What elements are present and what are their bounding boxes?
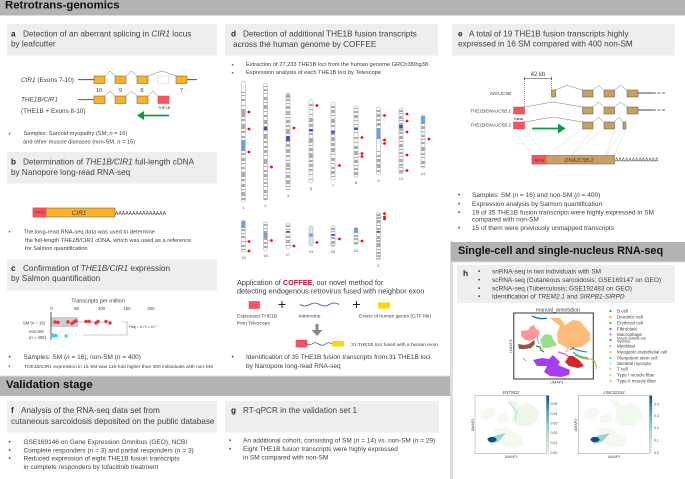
panel d notes: • xyxy=(232,70,234,76)
ideogram: chromosomes with THE1B fusion loci: 3 xyxy=(287,193,290,198)
UMAP legend: Dendritic cell xyxy=(617,314,643,320)
ideogram: chromosomes with THE1B fusion loci: 2 xyxy=(264,203,267,208)
COFFEE inputs: Exons of human genes (GTF file) xyxy=(359,314,431,320)
panel b heading: Determination of xyxy=(23,158,85,166)
diagram: CIR1 exons: 7 xyxy=(180,88,183,94)
ideogram: chromosomes with THE1B fusion loci: 20 xyxy=(331,249,336,254)
UMAP legend: Type II muscle fiber xyxy=(617,378,657,384)
diagram: THE1B/CIR1 fusion xyxy=(21,91,171,115)
diagram: CIR1 exons: 10 xyxy=(96,88,102,94)
COFFEE method title: detecting endogenous retrovirus fused with neighbor exon xyxy=(237,286,424,295)
panel g heading xyxy=(225,401,439,432)
panel c heading: c xyxy=(11,264,16,273)
UMAP legend: T cell xyxy=(617,366,628,372)
panel d notes: • xyxy=(232,62,234,68)
panel d result notes: by Nanopore long-read RNA-seq xyxy=(246,363,341,370)
arrow: gray down xyxy=(312,324,322,336)
COFFEE inputs xyxy=(237,301,431,326)
UMAP legend: Myogenic endothelial cell xyxy=(617,350,667,354)
feature plot: LINC02154: 0.1 xyxy=(654,438,659,442)
panel h heading and notes: • xyxy=(478,268,481,276)
panel b notes: • xyxy=(8,230,10,236)
feature plot: LINC02154: 0.0 xyxy=(654,451,659,455)
diagram: THE1B/CIR1 fusion: (THE1B + Exons 8-10) xyxy=(21,108,85,115)
panel h heading and notes: • xyxy=(478,285,481,292)
COFFEE inputs: Expressed THE1B xyxy=(237,314,277,320)
panel c heading: Confirmation of xyxy=(23,264,81,273)
ideogram: chromosomes with THE1B fusion loci: 14 xyxy=(421,171,426,176)
panel b notes: for Salmon quantification xyxy=(25,246,88,252)
ideogram: chromosomes with THE1B fusion loci: 12 xyxy=(399,176,404,181)
panel g notes: An additional cohort, consisting of SM (n = 14) vs. non-SM (n = 29) xyxy=(243,438,435,444)
ideogram: chromosomes with THE1B fusion loci: 15 xyxy=(241,255,246,260)
panel c notes: Samples: SM (n = 16), non-SM (n = 400) xyxy=(24,354,141,361)
panel e heading: expressed in 16 SM compared with 400 non-SM xyxy=(458,40,633,49)
COFFEE inputs: from Telescope xyxy=(237,320,270,326)
UMAP legend: Myoblast xyxy=(617,344,636,348)
feature plot: LINC02154: 0.2 xyxy=(654,426,659,430)
section header: Single-cell and single-nucleus RNA-seq xyxy=(450,241,685,479)
feature plot: ENTND2 xyxy=(471,390,557,459)
panel a heading: by leafcutter xyxy=(11,40,56,49)
panel g notes: in SM compared with non-SM xyxy=(243,454,328,462)
dot plot: transcripts per million: 100 xyxy=(98,306,106,311)
panel c heading: by Salmon quantification xyxy=(11,274,101,283)
feature plot: ENTND2: 0.02 xyxy=(550,431,557,435)
panel f notes: • xyxy=(8,456,12,462)
panel a heading: CIR1 locus xyxy=(151,30,191,38)
panel e heading: e xyxy=(458,30,463,38)
panel h heading and notes: snRNA-seq in two individuals with SM xyxy=(492,268,601,276)
panel a notes: Samples: Sarcoid myopathy (SM; n = 16) xyxy=(24,131,127,137)
diagram: THE1B/CIR1 fusion: THE1B/CIR1 xyxy=(21,96,58,104)
ideogram: chromosomes with THE1B fusion loci: 22 xyxy=(354,248,359,253)
panel c heading: THE1B/CIR1 expression xyxy=(81,264,170,273)
ideogram: chromosomes with THE1B fusion loci: 8 xyxy=(355,180,358,185)
dot plot: transcripts per million: 200 xyxy=(147,306,155,311)
panel e notes: • xyxy=(458,210,461,216)
UMAP: manual annotation xyxy=(508,308,596,384)
UMAP legend: Macrophage xyxy=(617,332,643,337)
feature plot: ENTND2: 0.01 xyxy=(550,441,557,445)
panel d notes xyxy=(232,62,428,76)
panel h heading and notes: scRNA-seq (Cutaneous sarcoidosis; GSE169147 on GEO) xyxy=(492,277,661,284)
panel e notes: • xyxy=(458,201,461,208)
panel g heading: g xyxy=(231,406,236,415)
feature plot: ENTND2: UMAP2 xyxy=(471,419,475,431)
dot plot: transcripts per million: 150 xyxy=(123,306,131,311)
feature plot: ENTND2: 0.05 xyxy=(550,402,557,406)
arrow: green antisense direction xyxy=(137,111,169,120)
feature plot: ENTND2: ENTND2 xyxy=(503,390,520,395)
feature plot: ENTND2: 0.03 xyxy=(550,422,557,426)
panel e notes: Samples: SM (n = 16) and non-SM (n = 400) xyxy=(472,192,600,199)
panel h heading and notes: scRNA-seq (Tuberculosis; GSE192483 on GEO) xyxy=(492,285,632,292)
panel d result notes: • xyxy=(232,354,234,361)
feature plot: LINC02154: 0.4 xyxy=(654,402,659,406)
section header: Validation stage: Validation stage xyxy=(6,379,93,391)
COFFEE inputs: Intronome xyxy=(298,314,321,320)
UMAP legend: Type I muscle fiber xyxy=(617,372,655,378)
UMAP legend: Erythroid cell xyxy=(617,320,643,326)
panel d result notes xyxy=(232,354,430,370)
panel c notes: • xyxy=(8,354,12,361)
diagram: DNAJC5B fusion isoforms: AAAAAAAAAAAAA xyxy=(615,158,659,164)
ideogram: chromosomes with THE1B fusion loci: 16 xyxy=(263,253,268,258)
panel g notes xyxy=(229,438,435,462)
panel f notes: • xyxy=(8,439,12,446)
panel a heading: Detection of an aberrant splicing in xyxy=(23,30,151,38)
dot plot: transcripts per million: SM (n = 16) xyxy=(23,320,46,326)
panel d heading: across the human genome by COFFEE xyxy=(233,40,377,49)
diagram: DNAJC5B fusion isoforms: 42 kb xyxy=(531,72,546,78)
UMAP legend xyxy=(610,308,667,384)
panel c heading xyxy=(7,259,217,290)
feature plot: LINC02154: UMAP1 xyxy=(608,455,620,459)
section header: Retrotrans-genomics xyxy=(0,0,685,16)
dot plot: transcripts per million: Padj = 8.72 x 10⁻⁷ xyxy=(129,325,158,329)
panel h heading and notes xyxy=(457,265,675,303)
COFFEE result: 31 THE1B loci fused with a human exon xyxy=(351,342,438,348)
UMAP: manual annotation: manual_annotation xyxy=(536,308,580,314)
diagram: full-length cDNA xyxy=(33,208,167,217)
panel h heading and notes: Identification of TREM2.1 and SIRPB1-SIRPD xyxy=(492,294,625,300)
ideogram: chromosomes with THE1B fusion loci: 17 xyxy=(286,252,291,257)
UMAP legend: Muscle satellite cell, xyxy=(617,336,646,340)
COFFEE result xyxy=(296,340,438,348)
COFFEE method title: Application of COFFEE, our novel method for xyxy=(237,278,384,287)
diagram: THE1B/CIR1 fusion: THE1B xyxy=(158,106,171,110)
UMAP legend: Pluripotent stem cell xyxy=(617,356,658,360)
UMAP legend: Fibroblast xyxy=(617,326,638,332)
panel e notes: 19 of 35 THE1B fusion transcripts were highly expressed in SM xyxy=(472,210,654,216)
feature plot: LINC02154 xyxy=(574,390,659,459)
panel f heading: cutaneous sarcoidosis deposited on the public database xyxy=(11,417,215,426)
panel g notes: • xyxy=(229,446,232,453)
panel h heading and notes: • xyxy=(478,294,481,300)
feature plot: ENTND2: 0.00 xyxy=(550,451,557,455)
diagram: DNAJC5B fusion isoforms: THE1B/DNAJC5B.1 xyxy=(470,108,511,114)
arrow: green sense direction xyxy=(532,124,566,134)
COFFEE method title xyxy=(237,278,424,295)
panel f notes: Complete responders (n = 3) and partial responders (n = 3) xyxy=(24,448,194,454)
panel f notes: • xyxy=(8,448,12,454)
ideogram: chromosomes with THE1B fusion loci: 7 xyxy=(332,183,335,188)
panel c notes: • xyxy=(8,364,10,370)
diagram: full-length cDNA: THE1B xyxy=(34,211,45,215)
panel c notes xyxy=(8,354,213,370)
panel f heading: f xyxy=(11,406,14,415)
UMAP: manual annotation: UMAP2 xyxy=(508,338,513,353)
panel d notes: Expression analysis of each THE1B loci by Telescope xyxy=(246,70,381,76)
ideogram: chromosomes with THE1B fusion loci xyxy=(241,81,430,268)
panel e notes: • xyxy=(458,225,461,232)
diagram: DNAJC5B fusion isoforms xyxy=(470,72,666,164)
ideogram: chromosomes with THE1B fusion loci: 19 xyxy=(309,249,314,254)
panel c notes: THE1B/CIR1 expression in 16 SM was 116-fold higher than 400 individuals with non-SM xyxy=(24,364,213,370)
panel e notes: Expression analysis by Salmon quantification xyxy=(472,201,602,208)
dot plot: transcripts per million: Transcripts per million xyxy=(71,298,125,304)
panel a notes: • xyxy=(8,132,10,138)
panel b notes: the full-length THE1B/CIR1 cDNA, which was used as a reference xyxy=(25,238,191,244)
panel f notes: in complete responders by tofacitinib treatment xyxy=(24,464,158,471)
panel h heading and notes: h xyxy=(463,269,468,278)
panel e notes xyxy=(458,192,654,232)
dot plot: transcripts per million xyxy=(23,298,158,340)
panel e notes: • xyxy=(458,192,461,199)
panel f notes: Reduced expression of eight THE1B fusion transcripts xyxy=(24,456,180,462)
panel a notes xyxy=(8,131,135,146)
UMAP legend: B cell xyxy=(617,308,628,314)
panel b notes xyxy=(8,230,191,252)
section header: Single-cell and single-nucleus RNA-seq: Single-cell and single-nucleus RNA-seq xyxy=(458,245,663,257)
panel b heading xyxy=(7,152,217,184)
panel f heading: Analysis of the RNA-seq data set from xyxy=(21,406,160,415)
panel g notes: • xyxy=(229,438,232,444)
ideogram: chromosomes with THE1B fusion loci: 1 xyxy=(242,205,245,210)
diagram: DNAJC5B fusion isoforms: THE1B xyxy=(514,117,523,121)
feature plot: ENTND2: UMAP1 xyxy=(505,455,517,459)
panel a heading: a xyxy=(11,30,16,38)
panel b heading: by Nanopore long-read RNA-seq xyxy=(11,168,131,177)
diagram: CIR1 exons xyxy=(21,71,197,94)
ideogram: chromosomes with THE1B fusion loci: 9 xyxy=(377,178,380,183)
panel g notes: Eight THE1B fusion transcripts were highly expressed xyxy=(243,446,398,453)
dot plot: transcripts per million: (n = 400) xyxy=(29,335,47,340)
panel h heading and notes: • xyxy=(478,277,481,284)
panel e notes: 15 of them were previously unmapped transcripts xyxy=(472,225,615,232)
panel f notes xyxy=(8,439,194,471)
diagram: full-length cDNA: CIR1 xyxy=(72,210,87,217)
panel a notes: and other muscle diseases (non-SM; n = 15) xyxy=(23,140,135,146)
dot plot: transcripts per million: 50 xyxy=(74,306,79,311)
panel e heading: A total of 19 THE1B fusion transcripts highly xyxy=(469,30,629,38)
feature plot: LINC02154: 0.3 xyxy=(654,414,659,418)
panel g heading: RT-qPCR in the validation set 1 xyxy=(243,406,358,415)
panel d heading: Detection of additional THE1B fusion transcripts xyxy=(243,30,417,38)
dot plot: transcripts per million: non-SM xyxy=(29,329,44,334)
diagram: DNAJC5B fusion isoforms: DNAJC5B xyxy=(490,91,511,96)
panel f heading xyxy=(7,401,217,432)
panel f notes: GSE169146 on Gene Expression Omnibus (GEO), NCBI xyxy=(24,439,187,446)
panel d heading: d xyxy=(231,30,236,38)
diagram: DNAJC5B fusion isoforms: THE1B xyxy=(534,158,545,162)
panel d notes: Extraction of 27,233 THE1B loci from the human genome GRCh38/hg38 xyxy=(246,62,428,68)
feature plot: ENTND2: 0.04 xyxy=(550,412,557,416)
panel d result notes: Identification of 35 THE1B fusion transcripts from 31 THE1B loci xyxy=(246,354,430,361)
panel e heading xyxy=(452,24,675,56)
panel b notes: The long-read RNA-seq data was used to determine xyxy=(24,230,155,236)
panel a heading xyxy=(7,24,217,56)
diagram: DNAJC5B fusion isoforms: THE1B/DNAJC5B.2 xyxy=(470,122,511,128)
diagram: CIR1 exons: 8 xyxy=(140,88,144,94)
diagram: CIR1 exons: 9 xyxy=(119,88,122,94)
panel b heading: b xyxy=(11,158,16,166)
feature plot: LINC02154: UMAP2 xyxy=(574,419,578,431)
section header: Validation stage xyxy=(0,376,450,396)
diagram: DNAJC5B fusion isoforms: DNAJC5B.2 xyxy=(564,158,594,164)
ideogram: chromosomes with THE1B fusion loci: 5 xyxy=(310,186,313,191)
feature plot: LINC02154: LINC02154 xyxy=(603,390,625,395)
diagram: full-length cDNA: AAAAAAAAAAAAAAA xyxy=(115,211,167,217)
diagram: CIR1 exons: CIR1 (Exons 7-10) xyxy=(21,77,74,84)
UMAP legend: Myoblast xyxy=(617,340,630,344)
panel b heading: THE1B/CIR1 full-length cDNA xyxy=(85,158,194,166)
ideogram: chromosomes with THE1B fusion loci: X xyxy=(377,263,380,268)
panel e notes: compared with non-SM xyxy=(472,216,539,224)
panel d heading xyxy=(225,24,438,56)
UMAP legend: Skeletal myocyte xyxy=(617,361,652,366)
UMAP: manual annotation: UMAP1 xyxy=(550,380,565,384)
dot plot: transcripts per million: 0 xyxy=(50,306,53,311)
